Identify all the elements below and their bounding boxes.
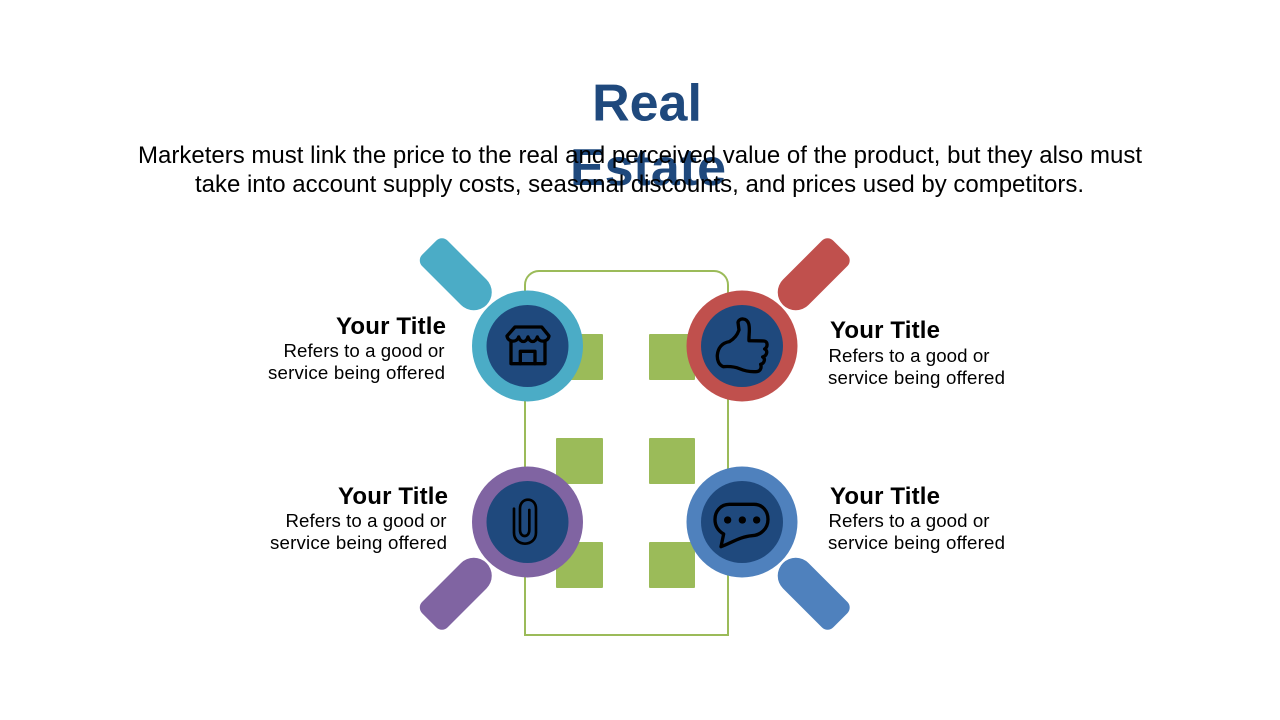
label: bottom right: service being offered — [828, 532, 1005, 553]
label: bottom left: Your Title — [338, 483, 448, 510]
lens: navy — [486, 481, 568, 563]
label: bottom right — [828, 483, 1005, 553]
label: bottom right: Your Title — [830, 483, 940, 510]
label: bottom left: Refers to a good or — [286, 510, 446, 531]
intro text: take into account supply costs, seasonal discounts, and prices used by competitors. — [195, 171, 1084, 198]
label: bottom left — [270, 483, 448, 553]
magnifier: thumbs up (top right) — [686, 235, 853, 402]
magnifier: store (top left) — [416, 235, 583, 402]
label: top right: Refers to a good or — [828, 345, 990, 366]
icon: store — [507, 327, 549, 364]
intro text: Marketers must link the price to the real and perceived value of the product, but they also must — [138, 142, 1142, 169]
label: top left: service being offered — [268, 362, 445, 383]
label: top right — [828, 317, 1005, 388]
building outline — [525, 271, 728, 635]
intro text — [138, 142, 1142, 198]
label: top right: Your Title — [830, 317, 940, 344]
handle: teal — [416, 235, 499, 318]
ring: red — [686, 290, 798, 402]
title — [570, 74, 726, 197]
lens: navy — [701, 481, 783, 563]
icon: chat bubble — [715, 504, 768, 547]
building windows — [556, 334, 695, 588]
handle: red — [770, 235, 853, 318]
icon: thumbs up — [717, 319, 767, 372]
ring: blue — [686, 466, 798, 578]
title: Real — [592, 74, 702, 132]
label: top left: Refers to a good or — [284, 340, 444, 361]
magnifier: paperclip (bottom left) — [416, 466, 583, 633]
label: top right: service being offered — [828, 367, 1005, 388]
magnifier: chat bubble (bottom right) — [686, 466, 853, 633]
label: bottom right: Refers to a good or — [828, 510, 990, 531]
label: bottom left: service being offered — [270, 532, 447, 553]
ring: purple — [472, 466, 583, 578]
handle: purple — [416, 550, 499, 633]
title: Estate — [570, 139, 726, 197]
handle: blue — [770, 550, 853, 633]
icon: paperclip — [514, 500, 536, 544]
lens: navy — [486, 305, 568, 387]
label: top left — [268, 313, 446, 383]
lens: navy — [701, 305, 783, 387]
label: top left: Your Title — [336, 313, 446, 340]
ring: teal — [472, 290, 583, 402]
